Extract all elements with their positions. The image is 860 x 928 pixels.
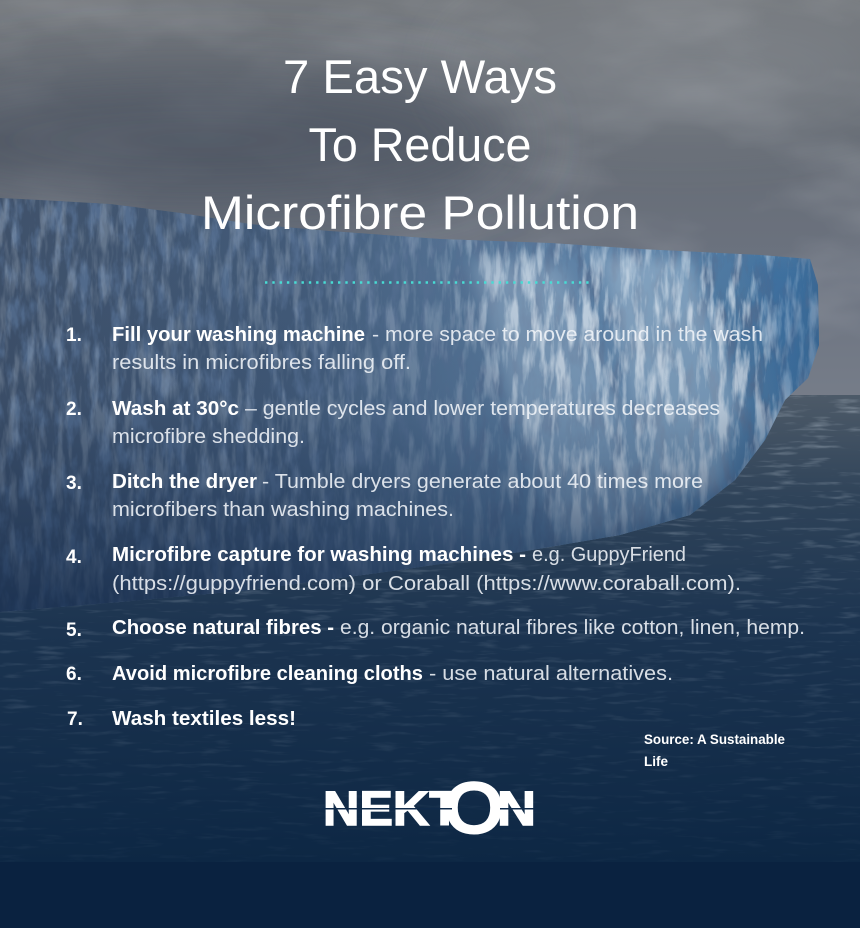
title: 7 Easy Ways (283, 50, 557, 103)
item 6 (66, 663, 673, 685)
numbered list (66, 324, 805, 730)
dotted divider (265, 281, 592, 284)
item 3: microfibers than washing machines. (112, 499, 454, 521)
item 3 (66, 471, 703, 521)
item 7: Wash textiles less! (112, 708, 296, 730)
item 5: e.g. organic natural fibres like cotton, linen, hemp. (340, 617, 805, 639)
logo: NEKTON: N (497, 783, 536, 836)
source note: Life (644, 753, 668, 769)
title: To Reduce (308, 118, 532, 171)
item 6: - use natural alternatives. (429, 663, 673, 685)
item 4: 4. (66, 547, 82, 568)
item 4: (https://guppyfriend.com) or Coraball (https://www.coraball.com). (112, 573, 741, 595)
title: Microfibre Pollution (201, 186, 639, 239)
background: ocean (0, 395, 860, 862)
item 1: 1. (66, 325, 82, 346)
item 6: 6. (66, 664, 82, 685)
background: stormy sky (0, 0, 860, 400)
logo: NEKTON: NEKT (323, 783, 460, 836)
item 4: e.g. GuppyFriend (532, 544, 686, 566)
source note: Source: A Sustainable (644, 731, 785, 747)
bottom navy band (0, 862, 860, 928)
item 1: - more space to move around in the wash (372, 324, 763, 346)
logo: NEKTON: O (445, 769, 503, 847)
item 3: - Tumble dryers generate about 40 times more (262, 471, 703, 493)
item 2 (66, 398, 720, 448)
item 4: Microfibre capture for washing machines - (112, 544, 526, 566)
item 5: Choose natural fibres - (112, 617, 334, 639)
title (201, 50, 639, 239)
item 2: – gentle cycles and lower temperatures decreases (245, 398, 720, 420)
logo: NEKTON (322, 769, 536, 847)
item 3: Ditch the dryer (112, 471, 257, 493)
item 2: microfibre shedding. (112, 426, 305, 448)
item 2: 2. (66, 399, 82, 420)
item 1 (66, 324, 763, 374)
item 3: 3. (66, 473, 82, 494)
item 6: Avoid microfibre cleaning cloths (112, 663, 423, 685)
source note (644, 731, 785, 769)
background: iceberg (0, 190, 830, 620)
item 1: results in microfibres falling off. (112, 352, 411, 374)
item 2: Wash at 30°c (112, 398, 239, 420)
item 1: Fill your washing machine (112, 324, 365, 346)
item 5 (66, 617, 805, 641)
item 5: 5. (66, 620, 82, 641)
item 7: 7. (67, 709, 83, 730)
item 4 (66, 544, 741, 595)
